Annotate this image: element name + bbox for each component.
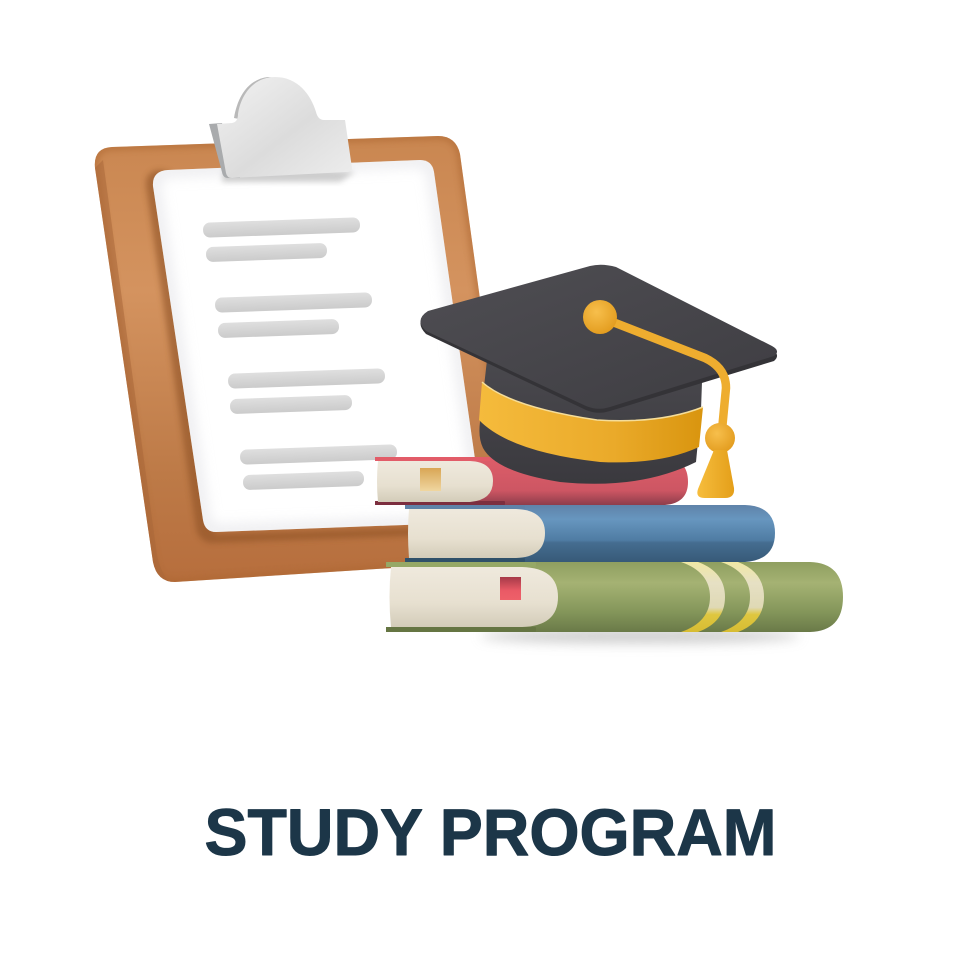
clipboard board bbox=[94, 136, 490, 582]
book shadow bbox=[480, 629, 800, 643]
tassel fringe bbox=[697, 450, 734, 498]
tassel button bbox=[583, 300, 617, 334]
tassel knot bbox=[705, 423, 735, 453]
green book bbox=[386, 562, 843, 632]
red book bbox=[375, 457, 688, 505]
clipboard clip bbox=[209, 77, 355, 182]
green book spine bands bbox=[681, 562, 725, 632]
title: STUDY PROGRAM bbox=[204, 795, 776, 869]
icon: graduation cap bbox=[420, 265, 777, 498]
clipboard paper bbox=[152, 160, 475, 532]
checklist lines bbox=[203, 217, 397, 490]
cap base bbox=[479, 360, 702, 484]
icon: stack of books bbox=[375, 457, 843, 632]
cap gold band bbox=[479, 382, 703, 462]
cap board bbox=[420, 265, 777, 413]
icon: clipboard bbox=[94, 77, 490, 582]
infographic canvas bbox=[94, 77, 843, 856]
tassel cord bbox=[605, 319, 726, 430]
blue book bbox=[405, 505, 775, 562]
